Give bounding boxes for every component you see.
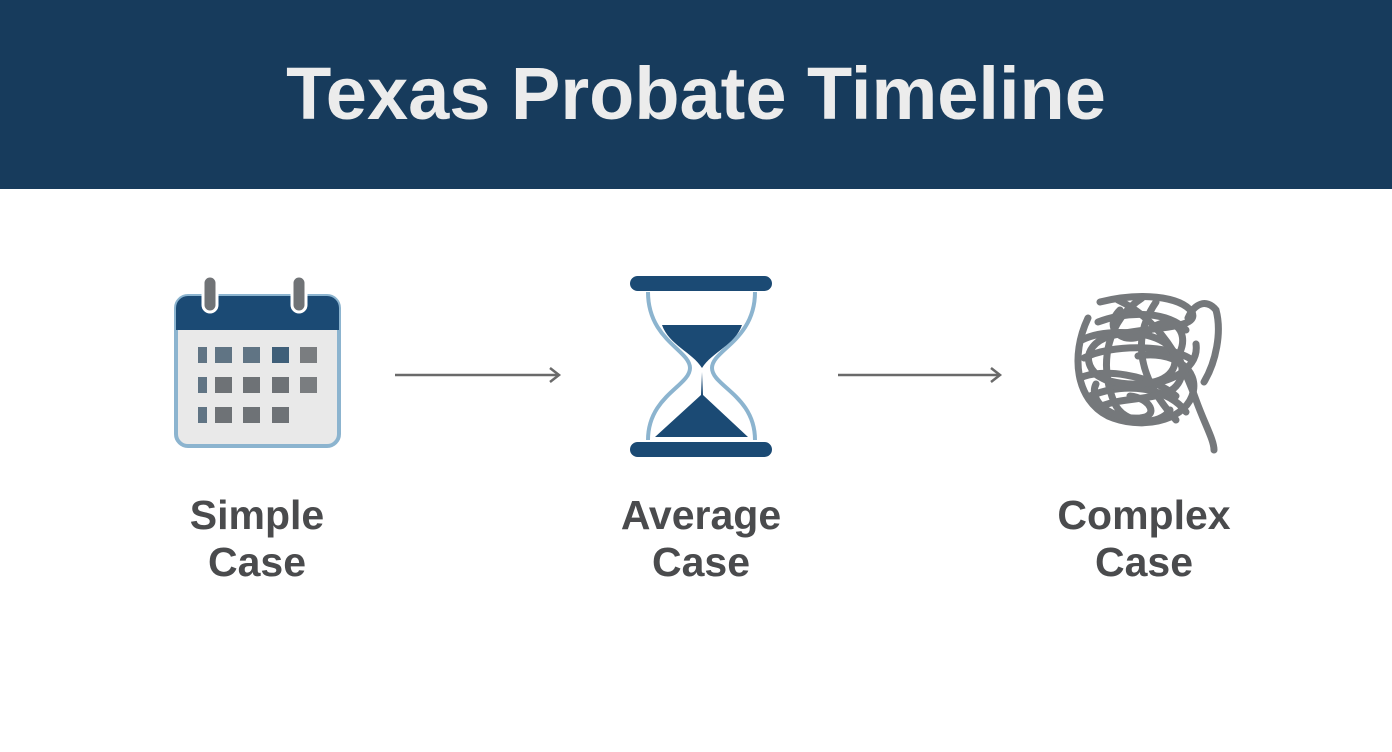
arrow 1	[395, 367, 561, 383]
title: Texas Probate Timeline	[286, 52, 1106, 135]
icon: calendar	[174, 278, 341, 448]
arrow 2	[838, 367, 1002, 383]
icon: tangle	[1074, 293, 1222, 454]
label: average case: Case	[652, 539, 750, 585]
label: simple case	[190, 492, 324, 585]
label: complex case: Complex	[1057, 492, 1231, 538]
header banner	[0, 0, 1392, 189]
icon: hourglass	[630, 276, 772, 457]
label: average case: Average	[621, 492, 781, 538]
label: simple case: Case	[208, 539, 306, 585]
label: simple case: Simple	[190, 492, 324, 538]
label: complex case: Case	[1095, 539, 1193, 585]
label: average case	[621, 492, 781, 585]
label: complex case	[1057, 492, 1231, 585]
